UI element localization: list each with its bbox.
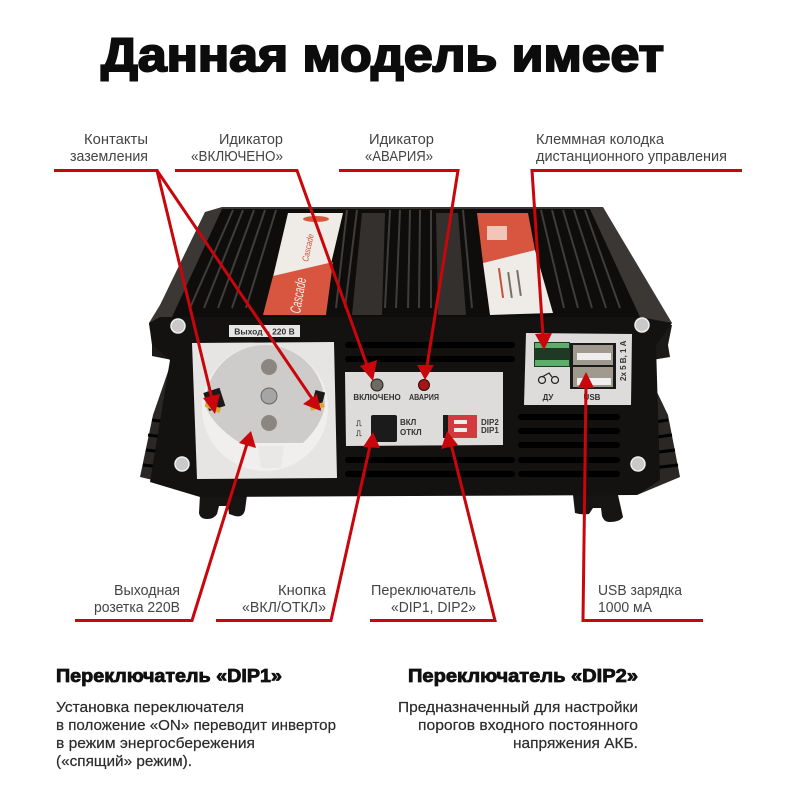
control panel: DIP2 [481, 418, 499, 427]
screws [171, 318, 649, 471]
callout: fault indicator: «АВАРИЯ» [365, 149, 433, 165]
left sticker: Cascade [300, 233, 316, 262]
panel: DIP2 description: напряжения АКБ. [513, 735, 638, 752]
panel: DIP2 description: Переключатель «DIP2» [408, 666, 638, 686]
panel: DIP2 description [398, 666, 638, 752]
control panel: ВКЛ [400, 418, 417, 427]
control panel [345, 372, 503, 446]
callout: on/off button [216, 432, 380, 620]
connector panel [524, 333, 632, 405]
callout: DIP switches: Переключатель [371, 583, 476, 599]
front plate [149, 317, 672, 497]
panel: DIP2 description: порогов входного постоянного [418, 717, 638, 734]
vent slots [345, 342, 620, 477]
panel: DIP1 description [56, 666, 336, 770]
panel: DIP1 description: Переключатель «DIP1» [56, 666, 282, 686]
connector panel: 2х 5 В, 1 А [619, 340, 628, 381]
callout: grounding contacts [54, 132, 321, 414]
output label: Выход – 220 В [234, 326, 295, 336]
lower side fins [140, 325, 680, 495]
callout: fault indicator [339, 132, 458, 380]
control panel: ОТКЛ [400, 428, 422, 437]
socket 220V [192, 342, 337, 479]
callout: output socket [75, 431, 256, 620]
control panel: DIP1 [481, 426, 499, 435]
callout: DIP switches [370, 431, 495, 620]
right sticker [477, 213, 553, 315]
callout: on/off button: «ВКЛ/ОТКЛ» [242, 600, 326, 616]
callout: remote terminal block: дистанционного управления [536, 149, 727, 165]
left sticker: Cascade [287, 276, 310, 315]
upper heatsink [149, 207, 672, 330]
callout: grounding contacts: Контакты [84, 132, 148, 148]
callout: DIP switches: «DIP1, DIP2» [391, 600, 476, 616]
panel: DIP2 description: Предназначенный для настройки [398, 699, 638, 716]
control panel: ⎍ [355, 419, 362, 428]
inverter device photo [140, 207, 680, 522]
callout: USB charging: USB зарядка [598, 583, 683, 599]
connector panel: ДУ [543, 393, 554, 402]
left sticker [263, 213, 343, 315]
callout: output socket: розетка 220В [94, 600, 180, 616]
connector panel: USB [584, 393, 601, 402]
panel: DIP1 description: в режим энергосбережения [56, 735, 255, 752]
callout: remote terminal block [532, 132, 742, 350]
title: Данная модель имеет [101, 28, 664, 81]
callout: fault indicator: Идикатор [369, 132, 434, 148]
control panel: ⎍ [355, 429, 362, 438]
callout: power indicator [175, 132, 377, 381]
panel: DIP1 description: Установка переключателя [56, 699, 244, 716]
control panel: АВАРИЯ [409, 393, 439, 402]
callout: remote terminal block: Клеммная колодка [536, 132, 665, 148]
panel: DIP1 description: («спящий» режим). [56, 753, 192, 770]
panel: DIP1 description: в положение «ON» переводит инвертор [56, 717, 336, 734]
callout: grounding contacts: заземления [70, 149, 148, 165]
callout: on/off button: Кнопка [278, 583, 327, 599]
callout: power indicator: «ВКЛЮЧЕНО» [191, 149, 283, 165]
callout: power indicator: Идикатор [219, 132, 283, 148]
control panel: ВКЛЮЧЕНО [353, 393, 401, 402]
mounting feet [199, 495, 623, 522]
callout: USB charging: 1000 мА [598, 600, 652, 616]
callout: USB charging [578, 372, 703, 620]
callout: output socket: Выходная [114, 583, 180, 599]
